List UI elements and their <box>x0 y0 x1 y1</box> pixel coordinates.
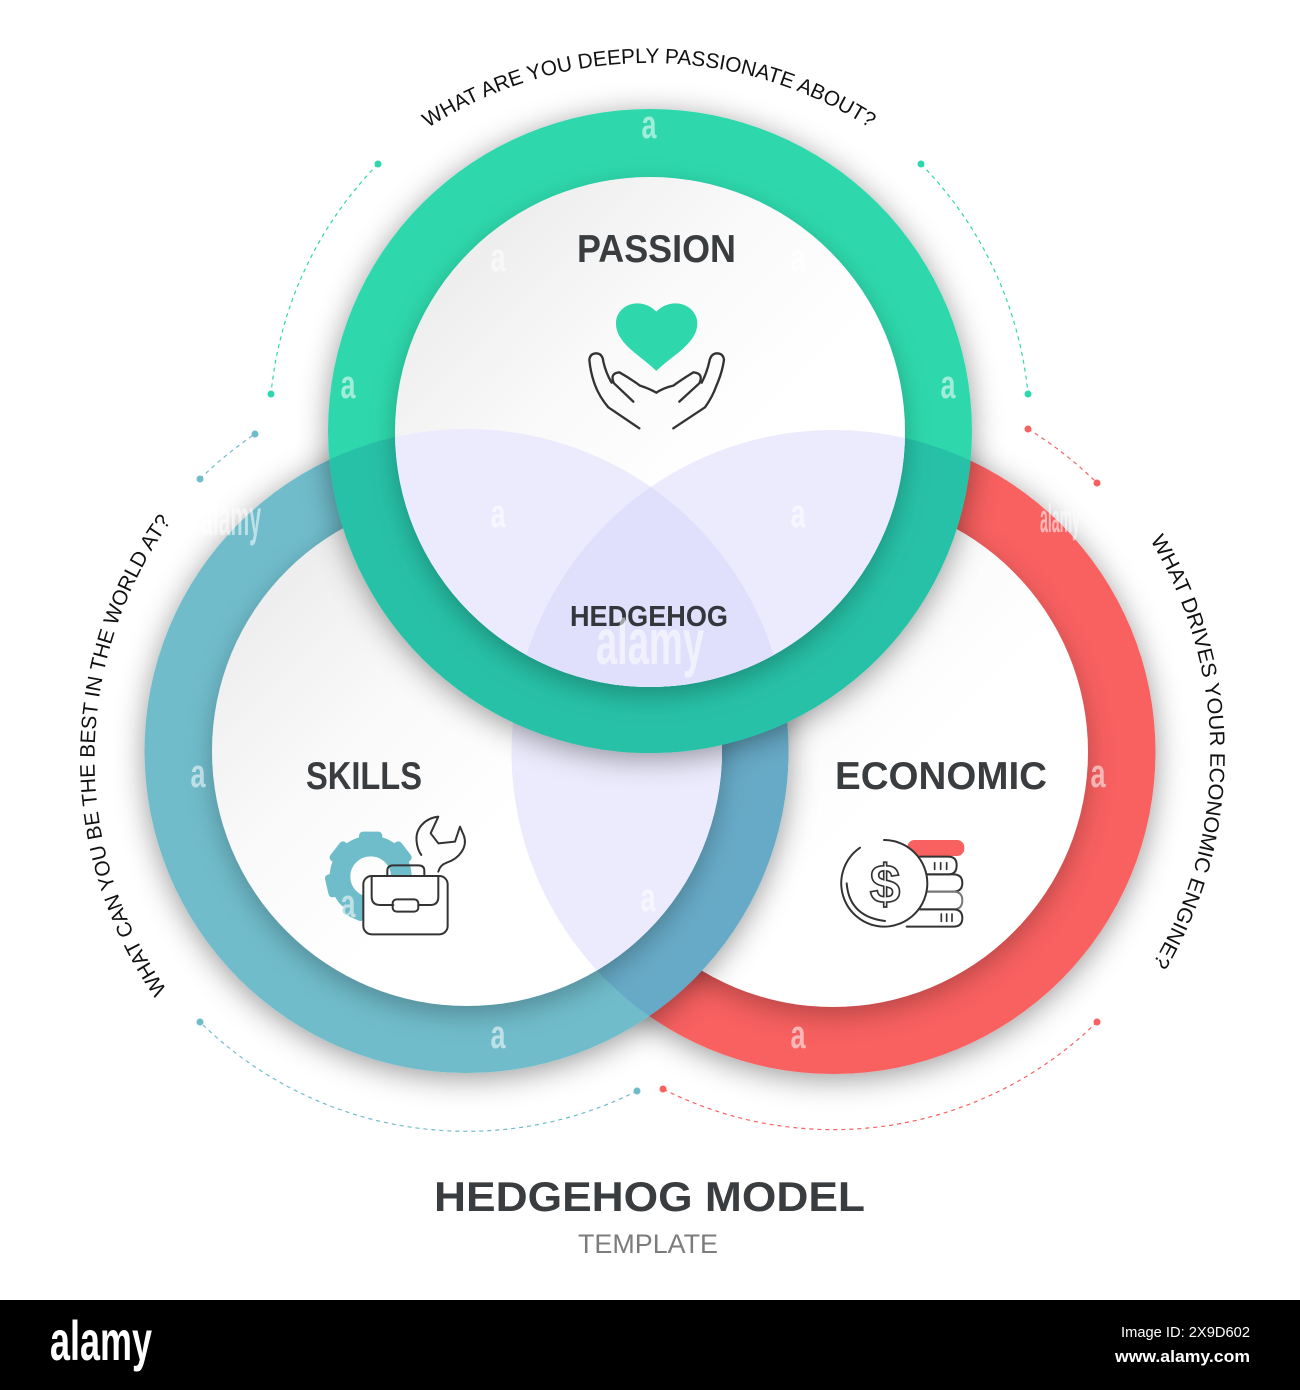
heading: hedgehog: HEDGEHOG <box>570 601 728 633</box>
arrow: skills dashed arc top <box>196 430 258 482</box>
panel: passion circle <box>308 94 992 778</box>
watermarks <box>190 103 1106 1057</box>
watermarks: a <box>190 752 206 796</box>
arrow: economic dashed arc bottom <box>660 1018 1100 1130</box>
heading: skills: SKILLS <box>306 755 422 798</box>
watermarks: alamy <box>201 490 261 546</box>
icon: gear, briefcase and wrench <box>324 817 465 934</box>
watermarks: a <box>490 492 506 536</box>
watermarks: a <box>790 1013 806 1057</box>
watermarks: a <box>790 492 806 536</box>
heading: economic: ECONOMIC <box>835 755 1047 798</box>
watermarks: a <box>1090 752 1106 796</box>
heading: passion: PASSION <box>577 228 736 271</box>
footer logo: alamy <box>50 1309 152 1372</box>
watermarks: a <box>642 103 657 147</box>
watermarks: a <box>790 236 806 280</box>
watermarks: a <box>940 363 956 407</box>
footer site url: www.alamy.com <box>1114 1347 1250 1366</box>
watermarks: a <box>640 876 656 920</box>
footer image id: Image ID: 2X9D602 <box>1121 1324 1250 1341</box>
title: HEDGEHOG MODEL <box>434 1173 865 1220</box>
arrow: skills dashed arc bottom <box>196 1018 640 1131</box>
icon: dollar coin and stack <box>841 840 964 927</box>
watermarks: a <box>340 363 356 407</box>
arrow: passion dashed arc left <box>268 160 382 398</box>
panel: economic circle <box>512 430 1156 1074</box>
icon: heart in hands <box>589 303 724 428</box>
text: economic question: WHAT DRIVES YOUR ECONOMIC ENGINE? <box>1152 532 1225 969</box>
watermarks: a <box>490 236 506 280</box>
icon: dollar coin and stack: $ <box>870 853 900 915</box>
subtitle: TEMPLATE <box>578 1229 718 1259</box>
arrow: economic dashed arc top <box>1024 426 1100 486</box>
watermarks: alamy <box>596 606 704 678</box>
footer bar <box>0 1300 1300 1390</box>
text: passion question: WHAT ARE YOU DEEPLY PASSIONATE ABOUT? <box>420 48 876 126</box>
watermarks: a <box>340 882 356 926</box>
arrow: passion dashed arc right <box>918 160 1032 398</box>
watermarks: a <box>490 1013 506 1057</box>
panel: skills circle <box>125 446 808 1098</box>
watermarks: alamy <box>1040 497 1080 541</box>
text: skills question: WHAT CAN YOU BE THE BEST IN THE WORLD AT? <box>80 514 168 998</box>
